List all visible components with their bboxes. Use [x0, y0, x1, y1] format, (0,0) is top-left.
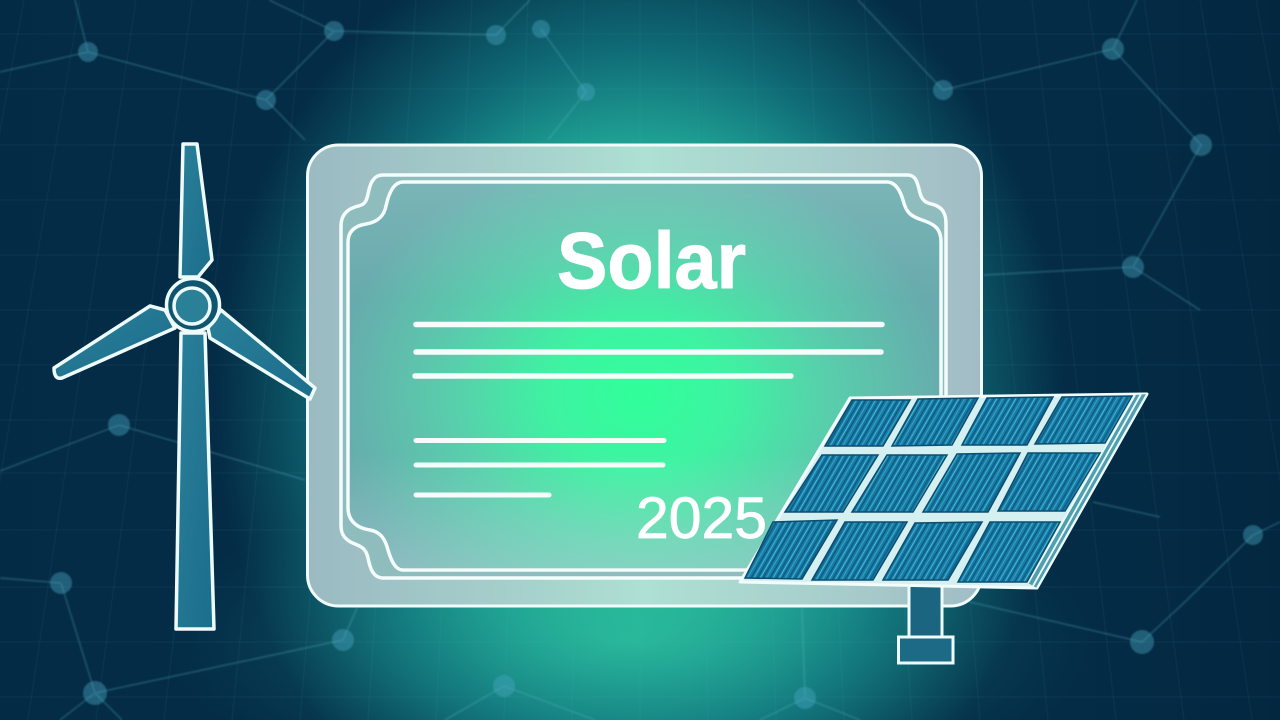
solar panel post: [909, 585, 942, 637]
card outer frame: [341, 175, 946, 578]
text lines: upper block: [415, 324, 882, 376]
turbine top blade: [180, 144, 212, 277]
card outer plate: [308, 145, 982, 606]
solar panel frame: [740, 394, 1147, 588]
title: Solar: [557, 216, 746, 305]
panel: certificate card: [308, 145, 982, 606]
icon: wind turbine: [54, 144, 315, 629]
text lines: lower block: [416, 440, 664, 495]
solar panel side lines: [1028, 394, 1147, 588]
year: 2025: [636, 486, 767, 551]
card inner light wash: [350, 184, 939, 568]
turbine right blade: [208, 310, 315, 399]
card inner frame: [348, 182, 941, 570]
solar panel side edge: [1028, 394, 1147, 588]
solar cells: [745, 396, 1132, 582]
turbine hub: [166, 278, 220, 332]
turbine left blade: [54, 306, 175, 378]
icon: solar panel: [740, 394, 1147, 663]
solar panel base: [898, 637, 953, 663]
turbine tower: [176, 333, 214, 629]
